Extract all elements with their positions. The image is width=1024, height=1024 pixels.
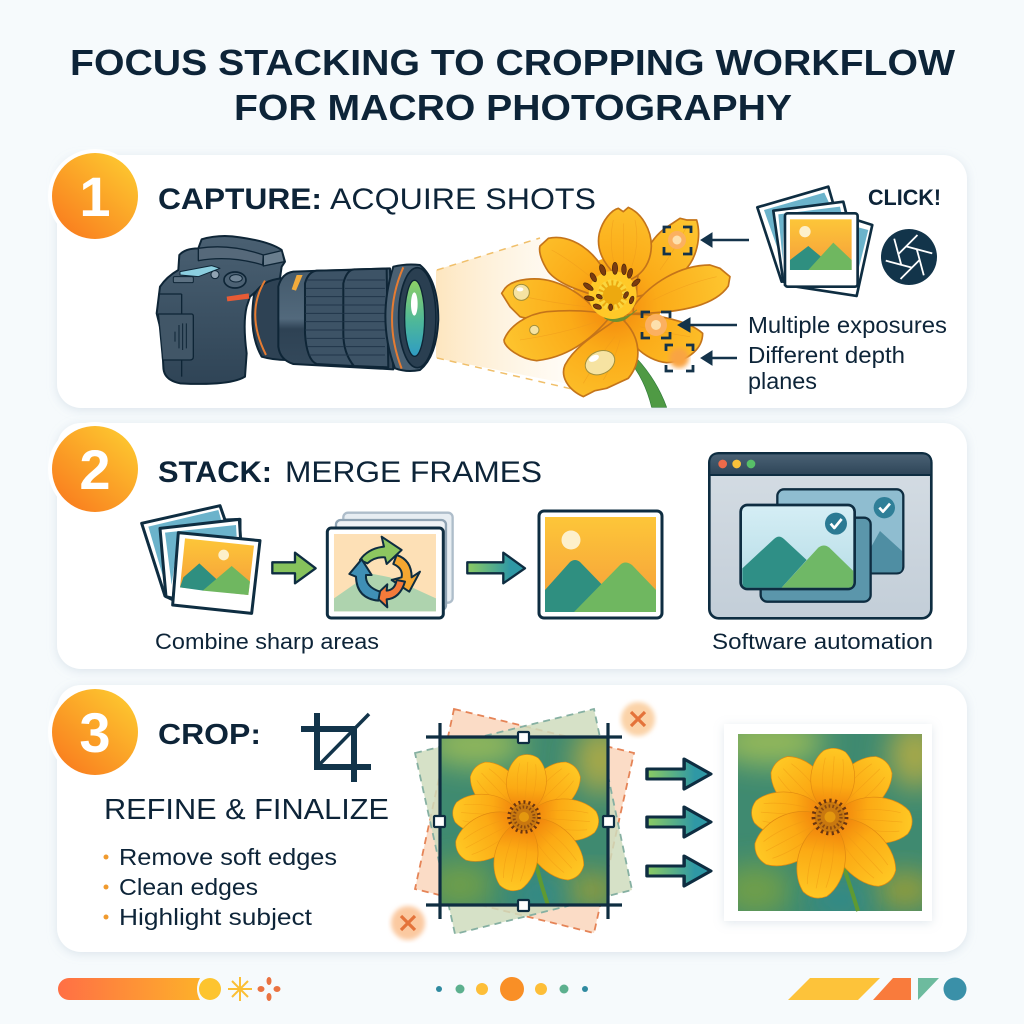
- badge: step 1: [48, 149, 142, 243]
- focus marker: middle: [642, 312, 670, 338]
- illustration: tilted frames with crop box: [415, 709, 634, 934]
- badge: step 2: 2: [79, 438, 111, 501]
- heading: capture: ACQUIRE SHOTS: [330, 183, 596, 216]
- badge: step 3: 3: [79, 701, 111, 764]
- heading: crop: CROP:: [158, 719, 261, 751]
- title: FOR MACRO PHOTOGRAPHY: [234, 87, 792, 128]
- label: click: CLICK!: [868, 185, 941, 210]
- heading: capture: CAPTURE:: [158, 183, 322, 216]
- list: crop tasks: Remove soft edges: [119, 844, 337, 870]
- text: capture callouts: planes: [748, 368, 817, 394]
- light beam from lens to flower: [436, 238, 600, 390]
- crop handles: [434, 732, 614, 911]
- panel: capture: [48, 149, 967, 408]
- footer decoration: left: [58, 977, 280, 1001]
- text: capture callouts: Multiple exposures: [748, 312, 947, 338]
- heading: capture: [158, 183, 596, 216]
- icon: merging frames: [327, 513, 453, 618]
- subheading: refine and finalize: REFINE & FINALIZE: [104, 794, 389, 826]
- icon: shutter aperture: [875, 223, 943, 291]
- crop box lines: [426, 723, 622, 919]
- heading: stack: STACK:: [158, 456, 272, 489]
- badge: step 2: [48, 422, 142, 516]
- badge: step 3: [48, 685, 142, 779]
- icon: flower with water drops: [502, 207, 730, 407]
- icon: merged result photo: [539, 511, 662, 618]
- arrows to focus markers: [678, 233, 749, 365]
- arrows: crop to final: [647, 759, 711, 886]
- focus markers: [642, 227, 693, 371]
- panel: crop: [48, 685, 967, 952]
- flower: final: [746, 746, 914, 902]
- blurred photo background: [442, 738, 606, 904]
- focus marker: top: [664, 227, 691, 254]
- beam dashed edges: [437, 238, 585, 392]
- heading: stack: MERGE FRAMES: [285, 456, 542, 489]
- footer decoration: right shapes: [788, 978, 966, 1000]
- text: capture callouts: Different depth: [748, 342, 905, 368]
- arrow: source to merge: [272, 553, 316, 583]
- list: crop tasks: Clean edges: [119, 874, 258, 900]
- stem: [535, 860, 548, 905]
- title: [70, 42, 955, 128]
- icon: software window: [709, 453, 931, 618]
- focus marker: bottom: [666, 345, 693, 371]
- arrow: merge to result: [467, 553, 525, 583]
- icon: camera: [157, 236, 438, 384]
- icon: reject mark bottom: [391, 906, 425, 940]
- icon: photo stack: [757, 187, 872, 296]
- footer decoration: center dots: [436, 977, 588, 1001]
- icon: source photo stack: [142, 506, 260, 613]
- icon: reject mark top: [621, 702, 655, 736]
- badge: step 1: 1: [79, 165, 111, 228]
- list: crop tasks: [104, 844, 337, 930]
- list: crop tasks: Highlight subject: [119, 904, 313, 930]
- flower: crop preview: [448, 752, 600, 895]
- title: FOCUS STACKING TO CROPPING WORKFLOW: [70, 42, 955, 83]
- text: software automation: Software automation: [712, 629, 933, 654]
- icon: crop tool: [301, 713, 371, 782]
- final cropped photo: [715, 718, 941, 921]
- heading: stack: [158, 456, 542, 489]
- text: combine sharp areas: Combine sharp areas: [155, 629, 379, 654]
- text: capture callouts: [748, 312, 947, 394]
- panel: stack: [48, 422, 967, 669]
